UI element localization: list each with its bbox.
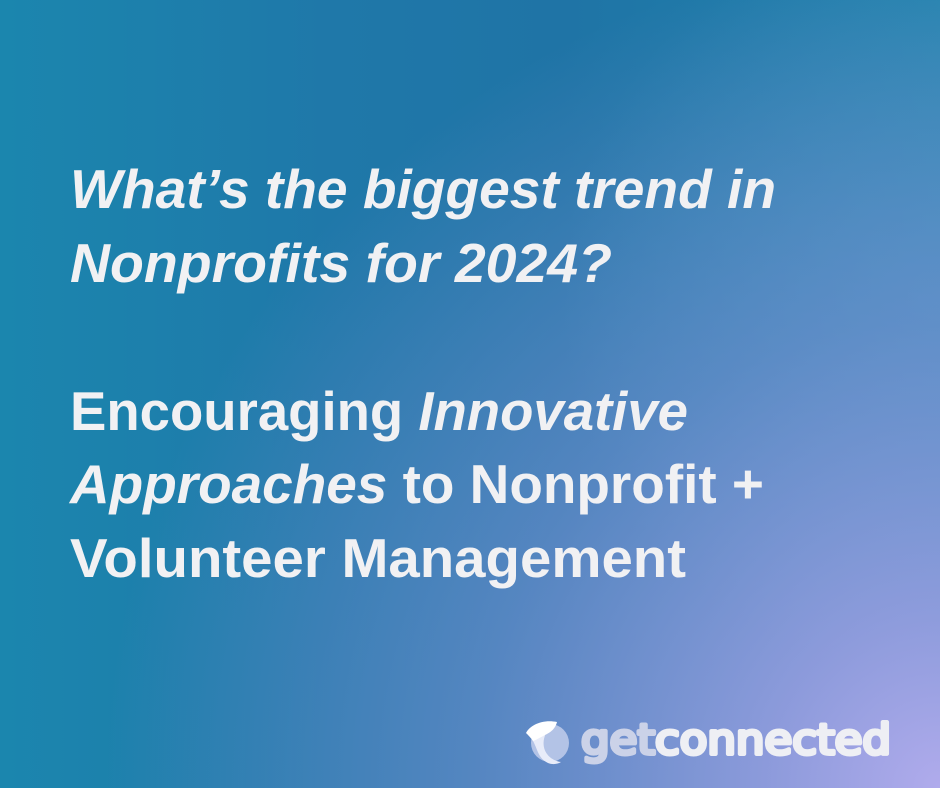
text block: answer: [68, 380, 764, 589]
icon: logo mark: [526, 721, 569, 764]
heading: question: What’s the biggest trend in: [70, 158, 776, 220]
heading: question: [70, 158, 776, 294]
text block: answer: Approaches to Nonprofit +: [68, 453, 764, 515]
heading: question: Nonprofits for 2024?: [70, 232, 612, 294]
text block: answer: Volunteer Management: [70, 527, 686, 589]
logo: getconnected: [526, 715, 891, 764]
wordmark: getconnected: [581, 715, 891, 764]
text block: answer: Encouraging Innovative: [70, 380, 688, 442]
